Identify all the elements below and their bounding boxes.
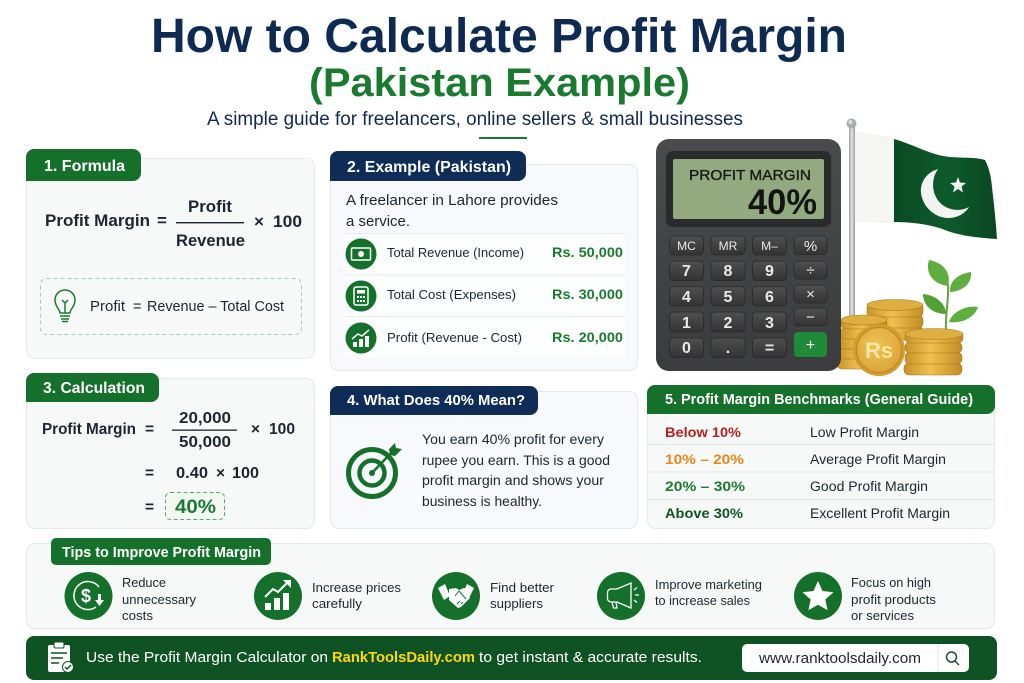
heading: 5. Benchmarks: 5. Profit Margin Benchmarks (General Guide) bbox=[665, 391, 973, 408]
explanation text bbox=[422, 432, 610, 509]
tip: increase prices: Increase prices bbox=[312, 580, 401, 595]
illustration: calculator bbox=[656, 139, 841, 371]
benchmark: 20-30%: Good Profit Margin bbox=[810, 479, 928, 494]
calculator keypad: M– bbox=[761, 239, 778, 253]
calculator keypad: MC bbox=[677, 239, 696, 253]
calculator keypad: 0 bbox=[682, 340, 691, 357]
calculator screen: PROFIT MARGIN bbox=[689, 167, 811, 184]
panel: benchmarks bbox=[647, 385, 995, 528]
benchmark: above 30%: Excellent Profit Margin bbox=[810, 506, 950, 521]
tagline: A simple guide for freelancers, online sellers & small businesses bbox=[207, 109, 743, 130]
benchmark: 10-20%: 10% – 20% bbox=[665, 451, 745, 467]
icon: magnifier bbox=[946, 652, 959, 665]
row: total cost bbox=[346, 280, 623, 312]
explanation text: business is healthy. bbox=[422, 494, 542, 509]
callout: profit definition bbox=[40, 278, 302, 334]
cta text: to get instant & accurate results. bbox=[479, 650, 702, 666]
tip: better suppliers bbox=[432, 572, 555, 620]
calculation line 1: 20,000 bbox=[179, 410, 231, 427]
coin stack: left bbox=[837, 315, 887, 369]
calculation line 1: × bbox=[251, 421, 260, 438]
calculator keypad: 6 bbox=[765, 289, 774, 306]
icon: target bbox=[348, 443, 402, 496]
calculator keypad: + bbox=[806, 337, 815, 354]
panel: tips bbox=[26, 538, 994, 628]
benchmark: below 10%: Below 10% bbox=[665, 424, 742, 440]
cta text: RankToolsDaily.com bbox=[332, 650, 475, 666]
call to action bar bbox=[26, 636, 997, 680]
calculation line 2: 0.40 bbox=[176, 465, 208, 482]
calculator keypad: 3 bbox=[765, 315, 774, 332]
calculation line 1: = bbox=[145, 421, 154, 438]
heading: 1. Formula: 1. Formula bbox=[44, 158, 125, 175]
calculator keypad: MR bbox=[719, 239, 738, 253]
intro text: A freelancer in Lahore provides bbox=[346, 193, 558, 209]
calculator keypad: − bbox=[806, 309, 815, 326]
icon: clipboard bbox=[48, 642, 74, 672]
calculator keypad: ÷ bbox=[806, 262, 815, 279]
panel: what 40% means bbox=[330, 386, 638, 528]
calculator screen: 40% bbox=[748, 183, 817, 222]
formula equation: = bbox=[157, 211, 167, 230]
calculator keypad: = bbox=[765, 340, 774, 357]
search box: www.ranktoolsdaily.com bbox=[758, 651, 921, 667]
heading: tips: Tips to Improve Profit Margin bbox=[62, 545, 261, 561]
tip: increase prices: carefully bbox=[312, 596, 363, 611]
calculation line 1 bbox=[42, 410, 295, 451]
calculator keypad: 5 bbox=[724, 289, 733, 306]
tip: improve marketing: to increase sales bbox=[655, 593, 750, 608]
benchmark: above 30%: Above 30% bbox=[665, 505, 744, 521]
benchmark: below 10% bbox=[665, 424, 919, 440]
calculator keypad: 1 bbox=[682, 315, 691, 332]
formula equation: Profit bbox=[188, 197, 232, 216]
formula equation: 100 bbox=[273, 212, 302, 231]
calculator screen bbox=[666, 151, 831, 227]
intro text bbox=[346, 193, 558, 230]
tip: increase prices bbox=[254, 572, 401, 620]
panel: example bbox=[330, 151, 638, 370]
calculation line 1: 50,000 bbox=[179, 434, 231, 451]
row: total revenue: Total Revenue (Income) bbox=[387, 245, 524, 260]
calculation line 1: Profit Margin bbox=[42, 421, 136, 438]
formula equation: Revenue bbox=[176, 231, 245, 250]
callout: profit definition: = bbox=[133, 299, 141, 315]
explanation text: You earn 40% profit for every bbox=[422, 432, 604, 447]
subtitle: Pakistan Example: (Pakistan Example) bbox=[309, 61, 690, 105]
cta text bbox=[86, 650, 702, 666]
calculator keypad bbox=[670, 236, 827, 358]
panel: formula bbox=[26, 149, 314, 358]
tip: reduce costs: unnecessary bbox=[122, 592, 196, 607]
row: total cost: Rs. 30,000 bbox=[552, 286, 623, 302]
callout: profit definition: Revenue – Total Cost bbox=[147, 299, 284, 315]
calculator keypad: 4 bbox=[682, 289, 691, 306]
row: profit: Rs. 20,000 bbox=[552, 329, 623, 345]
calculation line 1: 100 bbox=[269, 421, 295, 438]
title: How to Calculate Profit Margin bbox=[151, 10, 847, 63]
calculation line 2: 100 bbox=[232, 465, 259, 482]
row: total cost: Total Cost (Expenses) bbox=[387, 287, 516, 302]
tip: reduce costs: Reduce bbox=[122, 575, 166, 590]
heading: 4. What Does 40% Mean: 4. What Does 40% Mean? bbox=[347, 392, 525, 409]
tip: focus on high profit: Focus on high bbox=[851, 575, 931, 590]
benchmark: 20-30% bbox=[665, 478, 928, 494]
heading: 2. Example: 2. Example (Pakistan) bbox=[347, 159, 511, 176]
calculator keypad: 7 bbox=[682, 263, 691, 280]
calculator keypad: 9 bbox=[765, 263, 774, 280]
calculation result: = bbox=[145, 499, 154, 516]
benchmark: above 30% bbox=[665, 505, 950, 521]
calculation line 2 bbox=[145, 465, 259, 482]
tip: focus on high profit: or services bbox=[851, 608, 914, 623]
panel: calculation bbox=[26, 373, 314, 528]
calculator keypad: 2 bbox=[724, 315, 733, 332]
big rupee coin: Rs bbox=[865, 338, 893, 363]
formula equation: Profit Margin bbox=[45, 211, 150, 230]
search box bbox=[742, 644, 969, 672]
calculation result bbox=[145, 492, 224, 520]
calculation result: 40% bbox=[175, 497, 216, 518]
row: profit: Profit (Revenue - Cost) bbox=[387, 330, 522, 345]
calculator keypad: 8 bbox=[724, 263, 733, 280]
coin stack: right bbox=[904, 328, 963, 375]
tip: reduce costs: costs bbox=[122, 608, 154, 623]
explanation text: rupee you earn. This is a good bbox=[422, 453, 610, 468]
calculator keypad: % bbox=[804, 238, 817, 255]
row: profit bbox=[346, 322, 623, 354]
cta text: Use the Profit Margin Calculator on bbox=[86, 650, 328, 666]
calculation line 2: × bbox=[216, 465, 225, 482]
row: total revenue: Rs. 50,000 bbox=[552, 244, 623, 260]
benchmark: below 10%: Low Profit Margin bbox=[810, 425, 919, 440]
tip: focus on high profit: profit products bbox=[851, 592, 937, 607]
tip: reduce costs: $ bbox=[81, 586, 91, 606]
heading: 3. Calculation: 3. Calculation bbox=[43, 380, 145, 397]
tip: improve marketing bbox=[597, 572, 762, 620]
calculator keypad: . bbox=[726, 340, 730, 357]
benchmark: 10-20%: Average Profit Margin bbox=[810, 452, 946, 467]
callout: profit definition: Profit bbox=[90, 299, 125, 315]
formula equation: × bbox=[254, 212, 264, 231]
tip: focus on high profit bbox=[794, 572, 937, 623]
benchmark: 10-20% bbox=[665, 451, 946, 467]
benchmark: 20-30%: 20% – 30% bbox=[665, 478, 746, 494]
illustration: coins bbox=[837, 300, 963, 376]
intro text: a service. bbox=[346, 214, 410, 230]
explanation text: profit margin and shows your bbox=[422, 473, 605, 488]
tip: reduce costs bbox=[64, 572, 196, 623]
row: total revenue bbox=[346, 238, 623, 270]
icon: light bulb bbox=[55, 290, 75, 322]
formula equation bbox=[45, 197, 302, 250]
tip: better suppliers: Find better bbox=[490, 580, 555, 595]
calculator keypad: × bbox=[806, 286, 815, 303]
coin stack: back bbox=[867, 300, 923, 340]
illustration: plant bbox=[923, 260, 978, 332]
tip: better suppliers: suppliers bbox=[490, 596, 544, 611]
calculation line 2: = bbox=[145, 465, 154, 482]
tip: improve marketing: Improve marketing bbox=[655, 577, 762, 592]
illustration: flag bbox=[846, 118, 997, 316]
